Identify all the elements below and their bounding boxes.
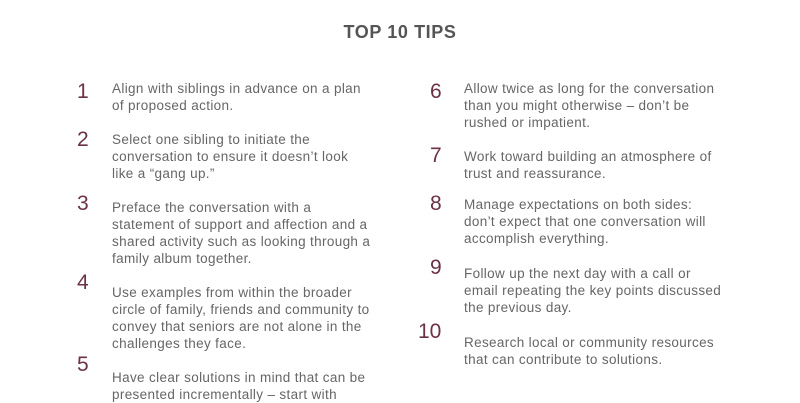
tip 7 text: trust and reassurance. (464, 166, 606, 181)
tip 2 text: like a “gang up.” (112, 166, 215, 181)
tip 9 text (464, 266, 721, 315)
tip 6 text: than you might otherwise – don’t be (464, 98, 689, 113)
tip 3 text: Preface the conversation with a (112, 200, 311, 215)
tip 3 number: 3 (77, 192, 89, 215)
tip 8 text: accomplish everything. (464, 231, 609, 246)
tip 3 text (112, 200, 370, 266)
tip 7 number: 7 (430, 144, 442, 167)
tip 7 text (464, 149, 712, 181)
tip 6 number: 6 (430, 80, 442, 103)
tip 3 text: family album together. (112, 251, 252, 266)
tip 4 number: 4 (77, 271, 89, 294)
tip 9 text: Follow up the next day with a call or (464, 266, 691, 281)
tip 5 text: Have clear solutions in mind that can be (112, 370, 365, 385)
panel: right column (418, 80, 721, 367)
tip 6 text: Allow twice as long for the conversation (464, 81, 714, 96)
tip 2 text (112, 132, 348, 181)
title: TOP 10 TIPS (344, 22, 456, 42)
tip 3 text: shared activity such as looking through a (112, 234, 370, 249)
tip 5 text (112, 370, 365, 402)
panel: left column (77, 80, 370, 402)
tip 8 number: 8 (430, 192, 442, 215)
tip 4 text: circle of family, friends and community to (112, 302, 370, 317)
tip 8 text: don’t expect that one conversation will (464, 214, 706, 229)
tip 10 number: 10 (418, 320, 441, 343)
tip 1 text (112, 81, 361, 113)
tip 4 text (112, 285, 370, 351)
tip 6 text (464, 81, 714, 130)
tip 9 text: email repeating the key points discussed (464, 283, 721, 298)
tip 5 number: 5 (77, 353, 89, 376)
tip 8 text (464, 197, 706, 246)
tip 2 text: Select one sibling to initiate the (112, 132, 310, 147)
tip 7 text: Work toward building an atmosphere of (464, 149, 712, 164)
tip 2 number: 2 (77, 128, 89, 151)
tip 10 text: Research local or community resources (464, 335, 714, 350)
tip 4 text: challenges they face. (112, 336, 246, 351)
tip 1 text: of proposed action. (112, 98, 233, 113)
tip 10 text (464, 335, 714, 367)
tip 6 text: rushed or impatient. (464, 115, 590, 130)
tip 1 number: 1 (77, 80, 89, 103)
tip 2 text: conversation to ensure it doesn’t look (112, 149, 348, 164)
tip 4 text: convey that seniors are not alone in the (112, 319, 362, 334)
tip 9 text: the previous day. (464, 300, 572, 315)
tip 1 text: Align with siblings in advance on a plan (112, 81, 361, 96)
tip 5 text: presented incrementally – start with (112, 387, 337, 402)
tip 4 text: Use examples from within the broader (112, 285, 352, 300)
tip 10 text: that can contribute to solutions. (464, 352, 662, 367)
tip 9 number: 9 (430, 256, 442, 279)
tip 8 text: Manage expectations on both sides: (464, 197, 692, 212)
tip 3 text: statement of support and affection and a (112, 217, 367, 232)
